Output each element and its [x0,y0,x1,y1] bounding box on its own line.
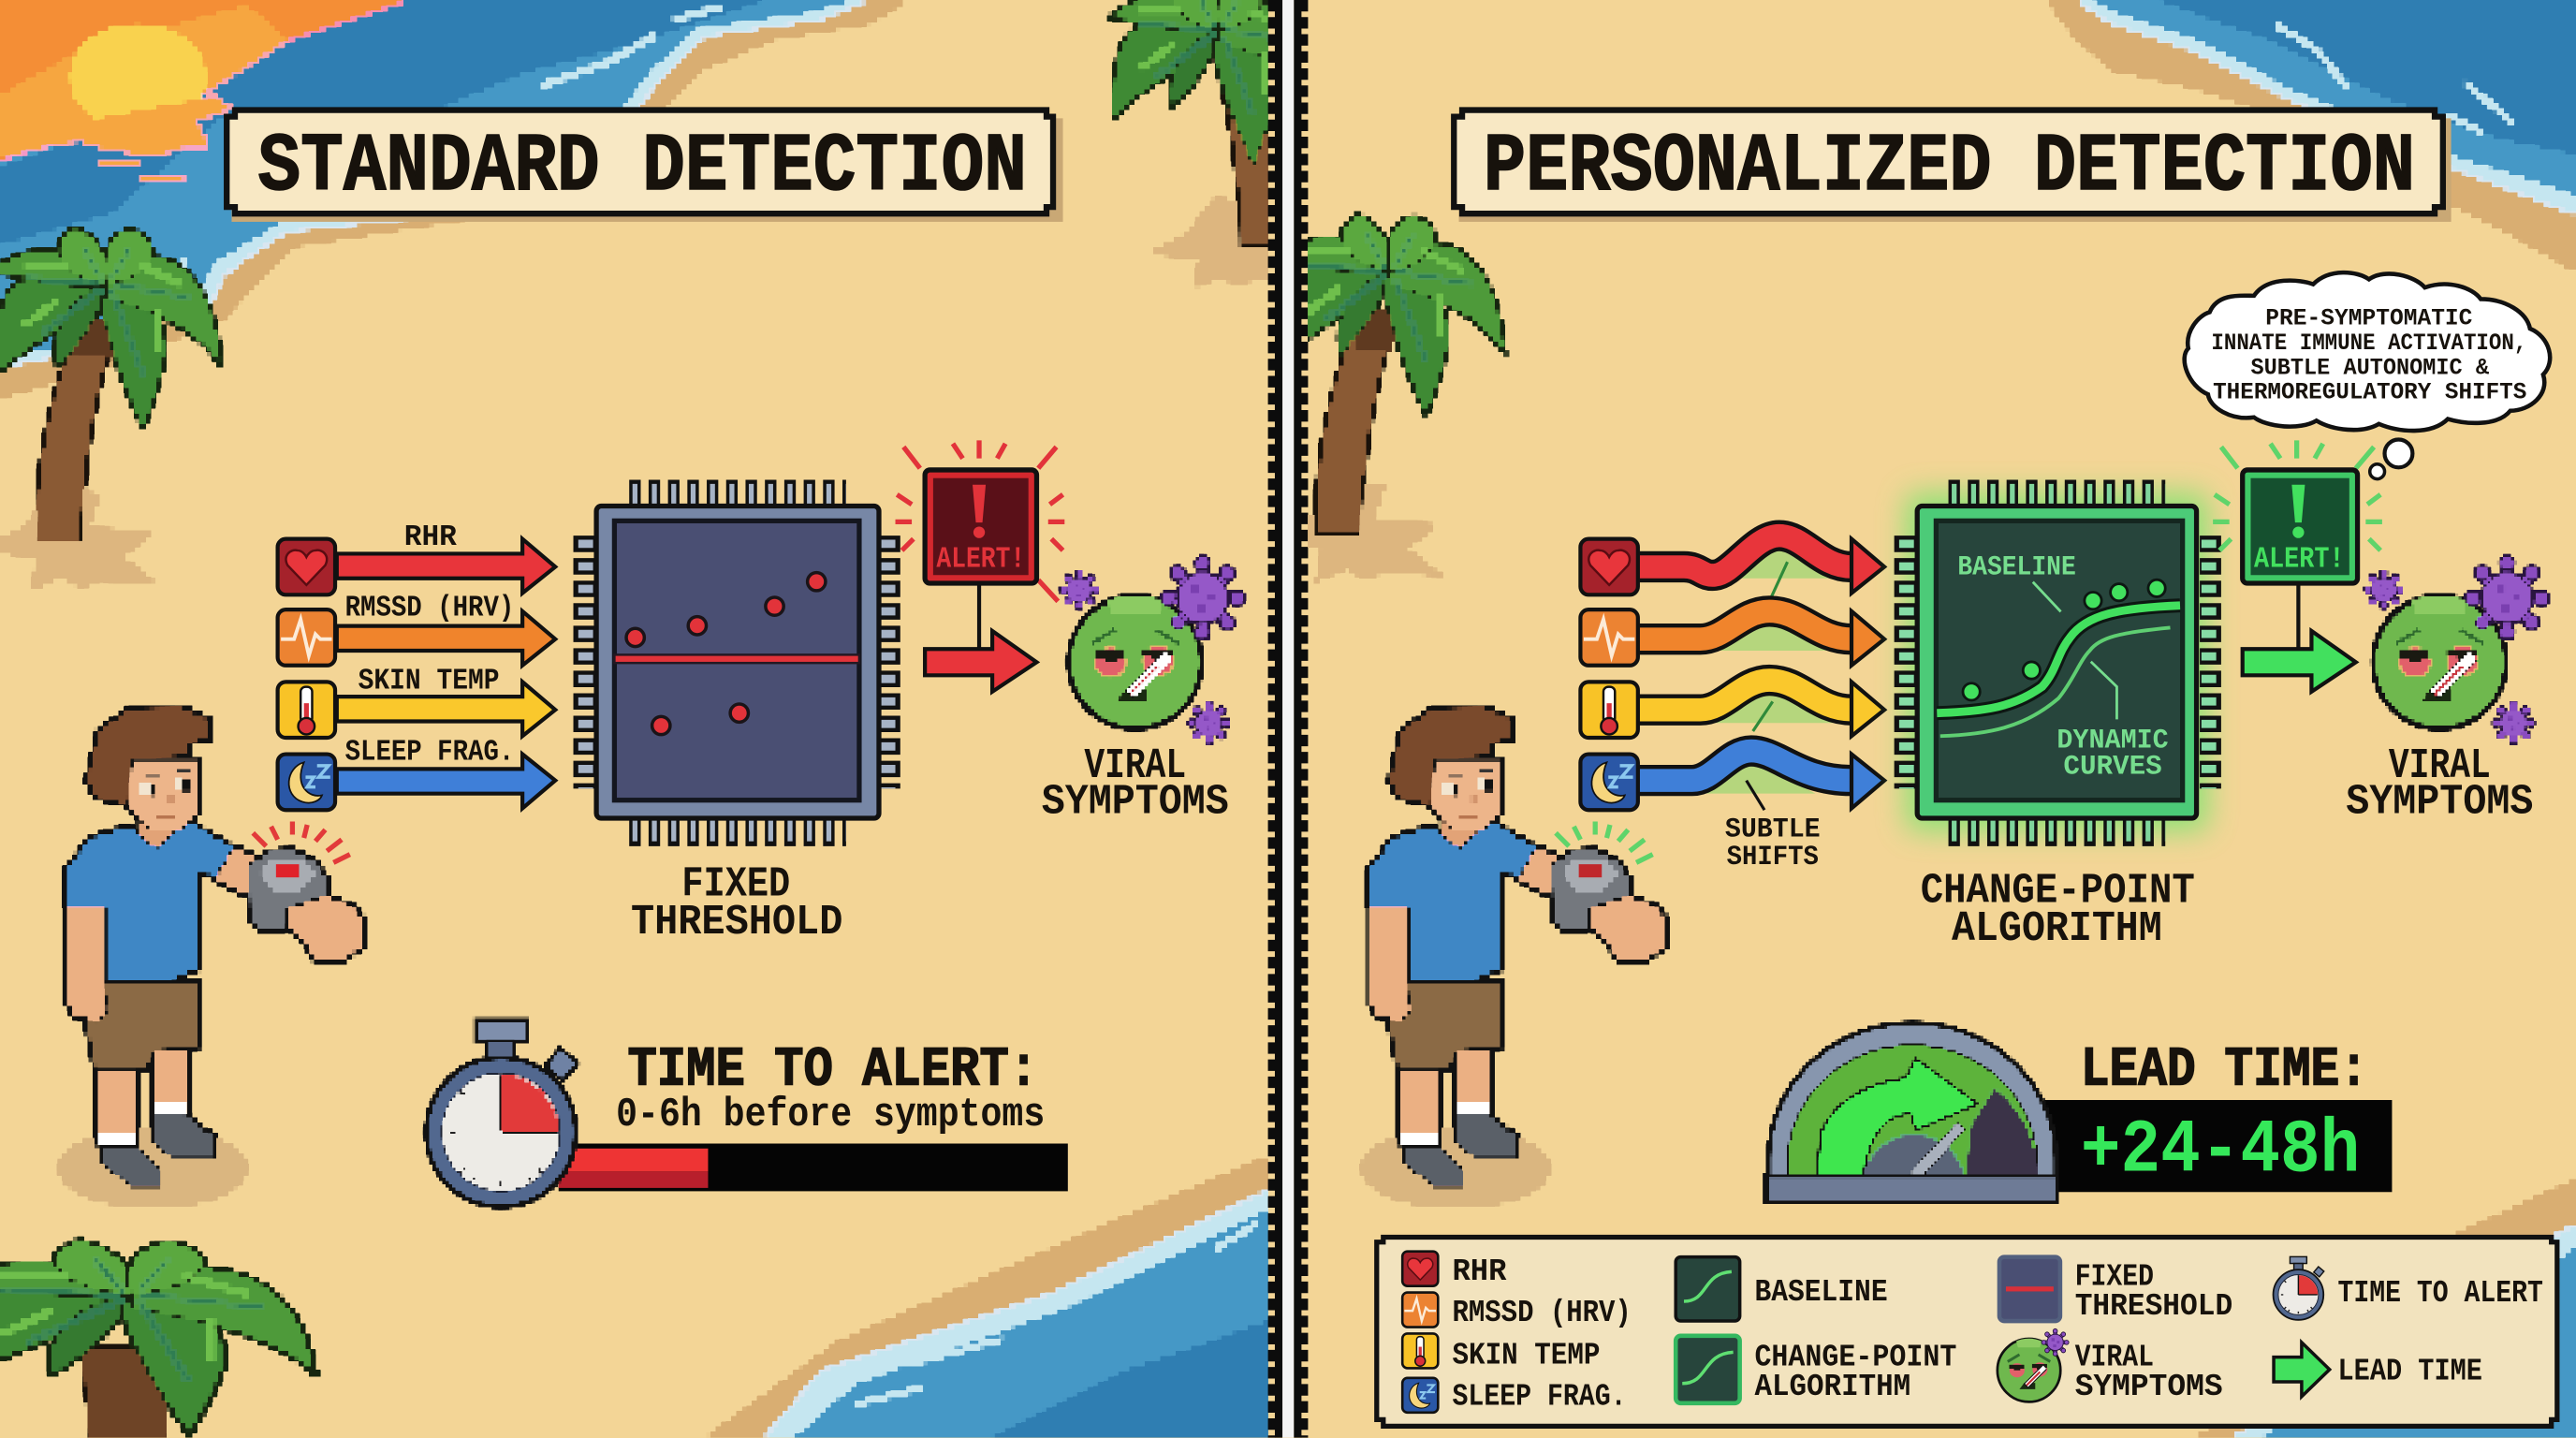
legend: biomarkers: SKIN TEMP [1453,1339,1600,1374]
wave: RHR [1580,536,1884,594]
alert sign: green [2213,440,2382,654]
label: viral symptoms: VIRAL [2389,741,2491,790]
panel: standard detection [0,0,1328,1438]
icon: sick face with viruses [1061,557,1244,743]
icon: sick face with viruses [2364,557,2548,743]
legend: viral symptoms [1998,1328,2223,1405]
icon: stopwatch [427,1020,577,1206]
beach scene: ocean bottom-right [2193,1180,2576,1438]
legend: fixed threshold [1999,1257,2232,1325]
arrow: RMSSD (HRV): RMSSD (HRV) [345,592,514,624]
label: change-point algorithm: CHANGE-POINT [1921,867,2195,916]
lead time heading: LEAD TIME: [2081,1037,2368,1101]
chip: change-point algorithm [1905,493,2210,831]
chip: change-point algorithm: BASELINE [1957,550,2076,582]
chip: change-point algorithm: DYNAMIC [2056,725,2169,756]
label: change-point algorithm: ALGORITHM [1952,904,2162,953]
palm tree: left [1266,215,1505,581]
input waves with biomarker icons [1580,536,1884,810]
thought bubble: SUBTLE AUTONOMIC & [2250,356,2489,381]
green hills under waves [1699,542,1834,794]
label: viral symptoms: VIRAL [1084,741,1186,790]
legend: time to alert: TIME TO ALERT [2338,1276,2543,1312]
thought bubble [2185,272,2550,479]
chip: change-point algorithm: CURVES [2063,751,2162,783]
wave: sleep [1580,751,1884,810]
legend: time to alert [2274,1256,2543,1320]
time to alert text: TIME TO ALERT: [627,1037,1038,1101]
label: subtle shifts: SHIFTS [1727,841,1819,873]
palm tree: bottom left [0,1240,315,1436]
label: subtle shifts [1725,813,1821,873]
arrow: skin temp [278,665,555,738]
person with smartwatch [1362,707,1667,1208]
alert sign: red: ALERT! [936,543,1025,576]
legend: viral symptoms: SYMPTOMS [2075,1370,2223,1405]
arrow: skin temp: SKIN TEMP [359,665,500,697]
palm tree: top right [1106,0,1268,289]
label: change-point algorithm [1921,867,2195,953]
watch LED and red alert rays [253,822,350,877]
arrow: alert to symptoms (green) [2243,631,2356,692]
time to alert text: 0-6h before symptoms [616,1092,1045,1138]
legend: change-point algorithm [1676,1336,1956,1405]
arrow: sleep fragmentation [278,737,555,810]
label: viral symptoms: SYMPTOMS [1042,778,1229,827]
arrow: RHR [278,521,555,594]
palm tree: left middle [0,228,222,590]
alert sign: green: ALERT! [2254,543,2345,576]
legend: fixed threshold: THRESHOLD [2075,1289,2232,1325]
legend: biomarkers: SLEEP FRAG. [1453,1380,1627,1416]
legend panel [1377,1238,2557,1426]
legend: baseline: BASELINE [1754,1275,1888,1311]
beach scene: ocean top-right [2047,0,2576,271]
legend: biomarkers: RMSSD (HRV) [1453,1296,1632,1331]
label: viral symptoms: SYMPTOMS [2346,778,2533,827]
legend: viral symptoms: VIRAL [2075,1340,2154,1375]
legend: fixed threshold: FIXED [2075,1259,2154,1295]
wave: RMSSD [1580,609,1884,666]
legend: baseline [1676,1257,1888,1321]
time to alert: bar [559,1143,1068,1191]
alert sign: red [896,440,1064,654]
lead time value box: +24-48h [2081,1108,2360,1194]
arrow: RMSSD (HRV) [278,592,555,666]
legend: biomarkers: RHR [1453,1255,1506,1290]
time to alert text [618,1047,1043,1134]
person with smartwatch [59,707,365,1208]
thought bubble: THERMOREGULATORY SHIFTS [2213,381,2526,406]
panel: personalized detection [1266,0,2576,1438]
wave: skin temp [1580,681,1884,738]
watch LED and green rays [1556,822,1653,877]
lead time gauge [1767,1023,2056,1201]
input arrows with biomarker icons [278,521,555,810]
arrow: sleep fragmentation: SLEEP FRAG. [345,737,514,770]
arrow: alert to symptoms (red) [925,631,1036,692]
label: viral symptoms [2346,741,2533,827]
title banner: personalized detection: PERSONALIZED DETECTION [1484,122,2415,214]
legend: change-point algorithm: ALGORITHM [1754,1370,1910,1405]
arrow: RHR: RHR [404,521,457,554]
panel divider [1271,0,1305,1438]
label: fixed threshold: FIXED [681,859,790,908]
beach scene: ocean bottom-right [707,1157,1268,1438]
thought bubble: PRE-SYMPTOMATIC [2265,307,2473,332]
legend: lead time [2274,1343,2482,1397]
thought bubble: INNATE IMMUNE ACTIVATION, [2211,331,2526,357]
beach scene: sunset ocean top-left [0,0,907,398]
label: fixed threshold: THRESHOLD [631,898,842,946]
legend: change-point algorithm: CHANGE-POINT [1754,1340,1956,1375]
label: fixed threshold [632,867,842,934]
legend: lead time: LEAD TIME [2338,1354,2482,1389]
legend: biomarkers [1402,1252,1632,1416]
chip: fixed threshold [584,493,889,831]
title banner: standard detection: STANDARD DETECTION [258,122,1027,214]
label: subtle shifts: SUBTLE [1725,813,1821,844]
label: viral symptoms [1043,749,1228,814]
